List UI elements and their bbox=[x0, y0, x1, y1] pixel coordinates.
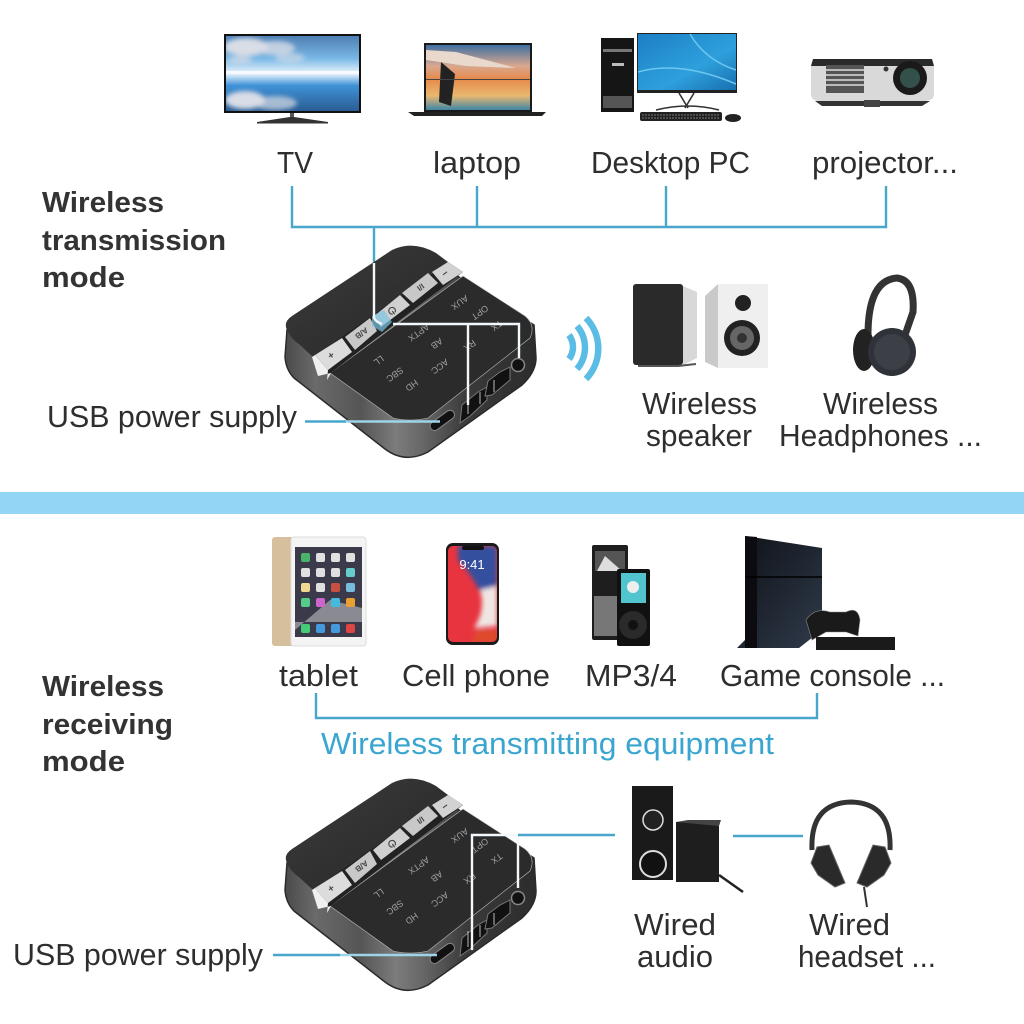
device printed labels: APTX bbox=[406, 854, 431, 876]
icon: MP3 players bbox=[592, 545, 650, 646]
device printed labels: RX bbox=[462, 338, 478, 353]
label: Wireless speaker bbox=[642, 386, 757, 453]
icon: cell phone: 9:41 bbox=[459, 557, 485, 572]
control strip: − bbox=[440, 268, 451, 280]
device printed labels: APTX bbox=[406, 321, 431, 343]
control strip: A/B bbox=[353, 325, 370, 341]
label: Wireless Headphones: Wireless bbox=[823, 386, 938, 421]
device printed labels: LL bbox=[372, 886, 386, 900]
connector: USB line bbox=[273, 954, 437, 956]
device printed labels: SBC bbox=[384, 365, 405, 384]
top face lower bbox=[330, 809, 532, 953]
icon: wireless speakers bbox=[633, 284, 768, 368]
divider band bbox=[0, 492, 1024, 514]
device printed labels: HD bbox=[403, 911, 420, 927]
device printed labels: AB bbox=[429, 869, 445, 884]
device printed labels: OPT bbox=[469, 836, 490, 855]
device printed labels: ACC bbox=[429, 357, 450, 376]
label: Wireless Headphones bbox=[779, 386, 982, 453]
top face lower bbox=[330, 276, 532, 420]
label: Wired audio: audio bbox=[637, 939, 713, 974]
heading: wireless transmission mode: transmission bbox=[42, 225, 226, 257]
device: receiver box bbox=[285, 779, 536, 990]
label: Wired audio: Wired bbox=[634, 907, 716, 942]
device printed labels: ACC bbox=[429, 890, 450, 909]
heading: wireless receiving mode: receiving bbox=[42, 709, 173, 741]
heading: wireless transmission mode bbox=[42, 187, 226, 294]
icon: tablet bbox=[272, 537, 366, 646]
icon: laptop bbox=[408, 43, 546, 116]
heading: wireless receiving mode bbox=[42, 671, 173, 778]
icon: projector bbox=[811, 59, 934, 107]
connector: white lines over device bbox=[372, 263, 519, 405]
device printed labels bbox=[372, 293, 504, 394]
label: wireless transmitting equipment: Wireless transmitting equipment bbox=[321, 726, 774, 761]
device printed labels: HD bbox=[403, 378, 420, 394]
icon: game console bbox=[737, 536, 895, 650]
connector: equipment bracket bbox=[316, 693, 817, 718]
control strip bbox=[312, 795, 463, 913]
icon: wireless headphones bbox=[853, 278, 916, 376]
device printed labels: TX bbox=[489, 851, 504, 866]
heading: wireless receiving mode: Wireless bbox=[42, 671, 164, 703]
connector: speaker to headset bbox=[733, 835, 803, 837]
label: MP3/4: MP3/4 bbox=[585, 658, 677, 693]
label: Cell phone: Cell phone bbox=[402, 658, 550, 693]
control strip: + bbox=[326, 350, 337, 362]
connector: receiver output lines bbox=[472, 835, 615, 950]
icon: desktop PC bbox=[601, 33, 741, 122]
device: transmitter box bbox=[285, 246, 536, 457]
heading: wireless transmission mode: mode bbox=[42, 262, 125, 294]
label: Wireless speaker: Wireless bbox=[642, 386, 757, 421]
control strip: ⏻ bbox=[385, 303, 398, 318]
label: Wireless speaker: speaker bbox=[646, 418, 752, 453]
device printed labels: AUX bbox=[449, 293, 470, 312]
device printed labels: LL bbox=[372, 353, 386, 367]
connector: USB line bbox=[305, 420, 440, 423]
label: Wired headset: Wired bbox=[809, 907, 890, 942]
label: tablet: tablet bbox=[279, 658, 358, 693]
control strip: + bbox=[326, 883, 337, 895]
label: USB power supply: USB power supply bbox=[47, 399, 297, 434]
device printed labels: OPT bbox=[469, 303, 490, 322]
control strip: A/B bbox=[353, 858, 370, 874]
icon: wireless signal waves bbox=[569, 318, 598, 379]
label: Wireless Headphones: Headphones ... bbox=[779, 418, 982, 453]
label: TV: TV bbox=[277, 145, 313, 180]
device printed labels: AB bbox=[429, 336, 445, 351]
label: Game console: Game console ... bbox=[720, 658, 945, 693]
label: Wired headset bbox=[798, 907, 936, 974]
heading: wireless transmission mode: Wireless bbox=[42, 187, 164, 219]
panel: wireless transmission mode bbox=[42, 33, 982, 457]
label: Desktop PC: Desktop PC bbox=[591, 145, 750, 180]
top face upper bbox=[286, 246, 448, 357]
device printed labels: AUX bbox=[449, 826, 470, 845]
control strip: − bbox=[440, 801, 451, 813]
label: projector: projector... bbox=[812, 145, 958, 180]
heading: wireless receiving mode: mode bbox=[42, 746, 125, 778]
control strip: I/I bbox=[415, 814, 426, 826]
device printed labels: TX bbox=[489, 318, 504, 333]
device printed labels: SBC bbox=[384, 898, 405, 917]
label: Wired audio bbox=[634, 907, 716, 974]
control strip: ⏻ bbox=[385, 836, 398, 851]
device ports bbox=[428, 892, 524, 965]
label: Wired headset: headset ... bbox=[798, 939, 936, 974]
icon: TV bbox=[224, 34, 361, 124]
icon: wired audio speakers bbox=[632, 786, 743, 892]
device ports bbox=[428, 358, 524, 432]
label: laptop: laptop bbox=[433, 145, 521, 180]
label: USB power supply: USB power supply bbox=[13, 937, 263, 972]
connector: source bracket bbox=[292, 186, 886, 263]
control strip: I/I bbox=[415, 281, 426, 293]
icon: cell phone bbox=[446, 543, 499, 645]
top face upper bbox=[286, 779, 448, 890]
device printed labels: RX bbox=[462, 871, 478, 886]
device printed labels bbox=[372, 826, 504, 927]
control strip bbox=[312, 262, 463, 380]
panel: wireless receiving mode bbox=[13, 536, 945, 990]
icon: wired headset bbox=[811, 802, 891, 907]
